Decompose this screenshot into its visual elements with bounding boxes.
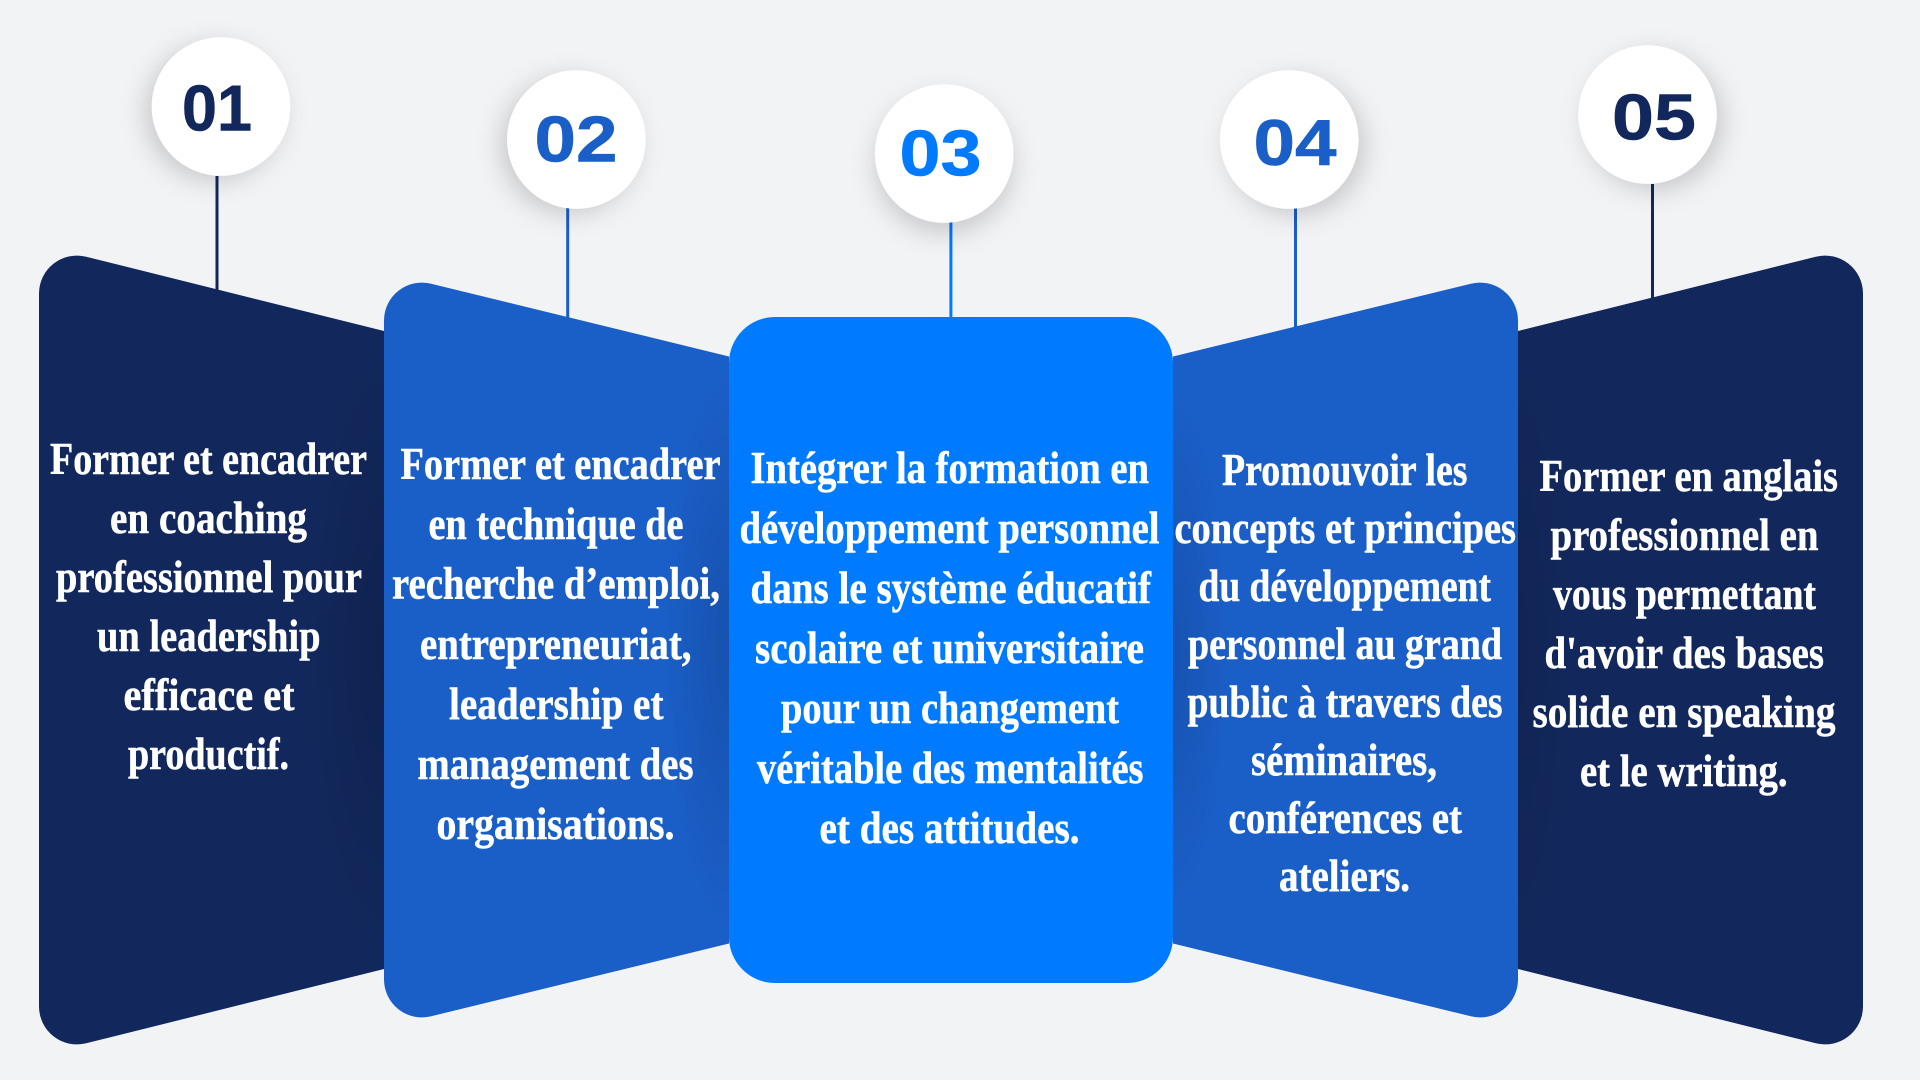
text: card 04: concepts et principes — [1174, 502, 1516, 553]
text: card 02: en technique de — [428, 498, 684, 549]
panel: card 04 — [1118, 283, 1518, 1017]
badge: 01 — [152, 37, 290, 176]
text: card 05: et le writing. — [1580, 745, 1788, 796]
text: card 01: un leadership — [97, 610, 320, 661]
text: card 01: efficace et — [124, 669, 295, 720]
connector: step 01 — [216, 176, 218, 292]
text: card 03 — [740, 442, 1160, 853]
text: card 04: du développement — [1198, 560, 1492, 611]
text: card 01: professionnel pour — [56, 551, 362, 602]
text: card 03: Intégrer la formation en — [750, 442, 1149, 493]
text: card 03: développement personnel — [740, 502, 1160, 553]
text: card 05: vous permettant — [1553, 568, 1817, 619]
panel: card 02 — [384, 283, 794, 1017]
text: card 04: conférences et — [1228, 792, 1463, 843]
text: card 04: personnel au grand — [1188, 618, 1502, 669]
panel: card 03 — [729, 317, 1173, 983]
badge: 03 — [875, 84, 1014, 223]
text: card 05: Former en anglais — [1540, 450, 1838, 501]
text: card 03: scolaire et universitaire — [755, 622, 1144, 673]
connector: step 03 — [949, 222, 952, 320]
text: card 02: entrepreneuriat, — [420, 618, 692, 669]
text: card 04: séminaires, — [1251, 734, 1437, 785]
text: card 02: leadership et — [449, 678, 664, 729]
badge: 02 — [507, 70, 646, 209]
connector: step 02 — [566, 208, 569, 320]
badge: 05 — [1578, 45, 1717, 184]
text: card 03: et des attitudes. — [820, 802, 1080, 853]
badge: 02: 02 — [534, 102, 618, 176]
text: card 02: recherche d’emploi, — [392, 558, 720, 608]
badge: 04: 04 — [1254, 106, 1336, 179]
badge: 01: 01 — [182, 72, 252, 144]
text: card 03: pour un changement — [781, 682, 1120, 733]
text: card 05 — [1532, 450, 1838, 796]
text: card 01: productif. — [128, 728, 289, 779]
text: card 05: d'avoir des bases — [1544, 627, 1824, 678]
connector: step 04 — [1294, 208, 1297, 330]
text: card 04 — [1174, 444, 1516, 901]
panel: card 01 — [39, 256, 459, 1044]
badge: 05: 05 — [1612, 80, 1696, 154]
text: card 04: ateliers. — [1279, 850, 1410, 901]
connector: step 05 — [1651, 184, 1654, 300]
text: card 02: Former et encadrer — [400, 438, 720, 489]
badge: 03: 03 — [900, 116, 982, 190]
badge: 04 — [1220, 70, 1359, 209]
text: card 04: Promouvoir les — [1222, 444, 1468, 495]
text: card 01 — [50, 433, 367, 779]
text: card 01: en coaching — [110, 492, 307, 543]
text: card 05: solide en speaking — [1532, 686, 1836, 737]
panel: card 05 — [1468, 256, 1863, 1044]
text: card 03: véritable des mentalités — [757, 742, 1144, 793]
text: card 04: public à travers des — [1188, 676, 1502, 727]
text: card 02: organisations. — [436, 798, 674, 849]
text: card 02: management des — [418, 738, 694, 789]
text: card 01: Former et encadrer — [50, 433, 367, 484]
text: card 05: professionnel en — [1550, 509, 1818, 560]
text: card 03: dans le système éducatif — [750, 562, 1152, 613]
text: card 02 — [392, 438, 720, 849]
